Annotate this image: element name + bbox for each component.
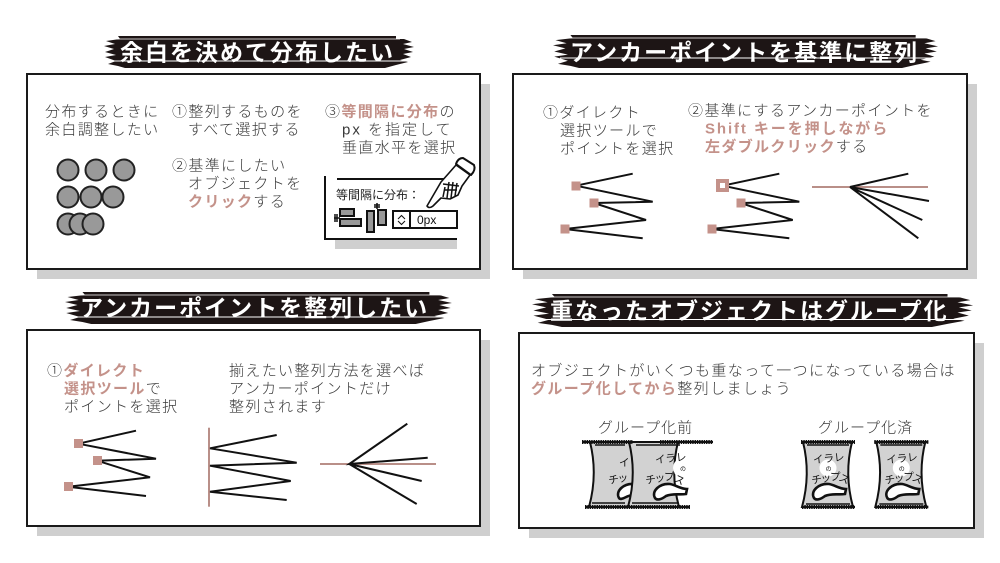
panel: 余白を決めて分布 xyxy=(27,74,490,279)
text: step 2: ②基準にしたい xyxy=(172,158,286,174)
illustration: overlapping bags before grouping: イ xyxy=(619,457,630,469)
illustration: grouped bag 1 xyxy=(801,442,855,507)
text: intro: 分布するときに xyxy=(45,104,159,120)
diagram: aligned fan xyxy=(812,174,929,238)
illustration: grouped bag 2: イラレ xyxy=(886,451,918,467)
diagram: selected anchor points xyxy=(560,174,653,238)
illustration: overlapping bags before grouping: チップス xyxy=(645,471,686,488)
text: step 3: 垂直水平を選択 xyxy=(342,140,456,156)
text: step 1: ポイントを選択 xyxy=(64,398,178,416)
ui panel: 等間隔に分布: 0px xyxy=(417,213,436,227)
text: step 2: オブジェクトを xyxy=(188,176,302,192)
illustration: grouped bag 2: チップス xyxy=(884,471,925,487)
text: explanation: 揃えたい整列方法を選べば xyxy=(229,362,425,380)
illustration: grouped bag 2 xyxy=(874,442,928,507)
illustration: grouped bag 2: の xyxy=(899,466,905,473)
text: step 1: ポイントを選択 xyxy=(560,140,674,158)
illustration: grouped bag 1: チップス xyxy=(811,471,851,487)
text: step 2: クリック xyxy=(188,194,253,210)
illustration: overlapping bags before grouping xyxy=(582,442,713,507)
text: explanation: 整列されます xyxy=(229,398,327,416)
icon: pointing hand xyxy=(427,158,475,208)
ui panel: 等間隔に分布: 等間隔に分布： xyxy=(336,188,420,202)
illustration: overlapping bags before grouping: の xyxy=(680,466,686,473)
text: step 1: 選択ツールで xyxy=(560,122,658,140)
text: step 1: で xyxy=(146,380,162,398)
heading: 余白を決めて分布したい: 余白を決めて分布したい xyxy=(120,40,395,66)
diagram: key anchor point chosen xyxy=(708,174,799,238)
panel: アンカーポイントを整列 xyxy=(27,330,490,536)
text: step 2: Shift キーを押しながら xyxy=(705,120,889,138)
ui panel: 等間隔に分布 xyxy=(325,176,457,249)
heading: アンカーポイントを整列したい: アンカーポイントを整列したい xyxy=(80,295,429,321)
text: step 1: ①ダイレクト xyxy=(47,362,145,380)
text: step 1: 選択ツール xyxy=(64,380,146,398)
text: step 2: する xyxy=(836,138,869,156)
diagram: selected points xyxy=(64,431,156,496)
text: explanation: オブジェクトがいくつも重なって一つになっている場合は xyxy=(531,362,956,380)
panel: グループ化 xyxy=(519,333,984,538)
heading: 重なったオブジェクトはグループ化: 重なったオブジェクトはグループ化 xyxy=(550,298,949,324)
text: explanation: グループ化してから xyxy=(531,380,677,398)
text: step 1: ①ダイレクト xyxy=(543,104,641,122)
text: intro: 余白調整したい xyxy=(45,122,159,138)
diagram: left aligned xyxy=(209,428,297,507)
text: explanation: アンカーポイントだけ xyxy=(229,380,392,398)
text: step 3: px を指定して xyxy=(342,122,453,138)
text: explanation: 整列しましょう xyxy=(677,380,792,398)
text: step 2: する xyxy=(253,194,286,210)
illustration: grouped bag 1: イラレ xyxy=(813,451,845,467)
text: step 1: すべて選択する xyxy=(188,122,301,138)
text: step 2: 左ダブルクリック xyxy=(705,138,836,156)
illustration: overlapping bags before grouping: イラレ xyxy=(655,451,687,466)
diagram: aligned fan xyxy=(320,424,436,504)
label: グループ化前: グループ化前 xyxy=(598,420,693,436)
text: step 1: ①整列するものを xyxy=(172,104,303,120)
circles: distribution samples xyxy=(58,160,134,234)
heading: アンカーポイントを基準に整列: アンカーポイントを基準に整列 xyxy=(570,40,919,66)
text: step 2: ②基準にするアンカーポイントを xyxy=(688,102,933,120)
illustration: overlapping bags before grouping: チッ xyxy=(608,472,629,487)
illustration: grouped bag 1: の xyxy=(826,466,832,473)
label: グループ化済: グループ化済 xyxy=(818,420,913,436)
panel: アンカーポイントを基準に整列 xyxy=(513,74,977,279)
text: step 3: ③等間隔に分布の xyxy=(325,104,456,120)
